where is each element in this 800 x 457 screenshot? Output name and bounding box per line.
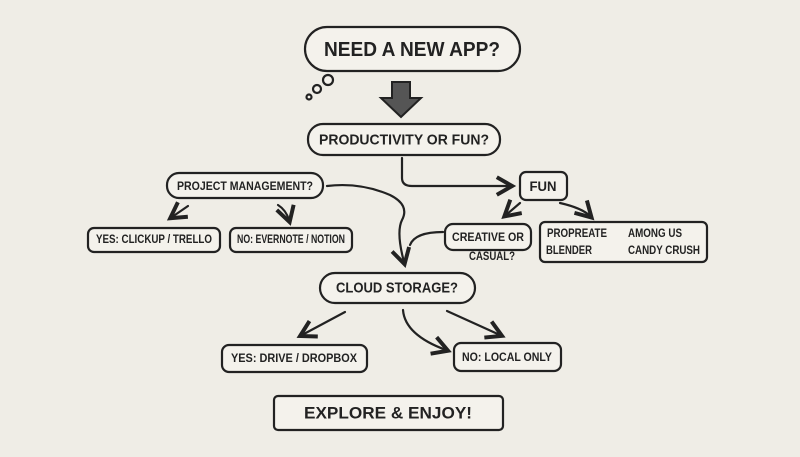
node: creative or casual [445, 224, 531, 263]
node: yes clickup [88, 228, 220, 252]
node: yes drive [222, 345, 367, 372]
node: fun: FUN [530, 178, 556, 194]
node: apps list: PROPREATE [547, 228, 607, 240]
node: productivity or fun [308, 124, 500, 155]
arrow: down hatched [381, 82, 421, 117]
arrow: to fun [402, 158, 510, 186]
node: creative or casual: CASUAL? [469, 249, 515, 263]
node: explore: EXPLORE & ENJOY! [304, 404, 472, 422]
node: cloud storage [320, 273, 475, 303]
arrow: pm to cloud [327, 185, 404, 262]
node: productivity or fun: PRODUCTIVITY OR FUN? [319, 132, 489, 148]
arrows: fun branches [506, 203, 590, 216]
arrows: pm branches [172, 205, 289, 220]
node: no evernote [230, 228, 352, 252]
node: apps list: BLENDER [546, 245, 593, 257]
title bubble [305, 27, 520, 100]
node: project management: PROJECT MANAGEMENT? [177, 179, 313, 193]
node: cloud storage: CLOUD STORAGE? [336, 280, 458, 296]
title bubble: NEED A NEW APP? [324, 39, 500, 61]
node: no evernote: NO: EVERNOTE / NOTION [237, 234, 345, 246]
node: fun [520, 172, 567, 200]
node: project management [167, 173, 323, 198]
arrow: creative to cloud [410, 232, 443, 245]
arrows: cloud branches [302, 310, 500, 350]
node: apps list: AMONG US [628, 228, 682, 240]
node: creative or casual: CREATIVE OR [452, 230, 524, 244]
node: apps list: CANDY CRUSH [628, 245, 700, 257]
node: no local: NO: LOCAL ONLY [462, 350, 552, 364]
node: yes drive: YES: DRIVE / DROPBOX [231, 351, 357, 365]
node: apps list [540, 222, 707, 262]
node: explore [274, 396, 503, 430]
node: yes clickup: YES: CLICKUP / TRELLO [96, 234, 212, 246]
node: no local [454, 343, 561, 371]
